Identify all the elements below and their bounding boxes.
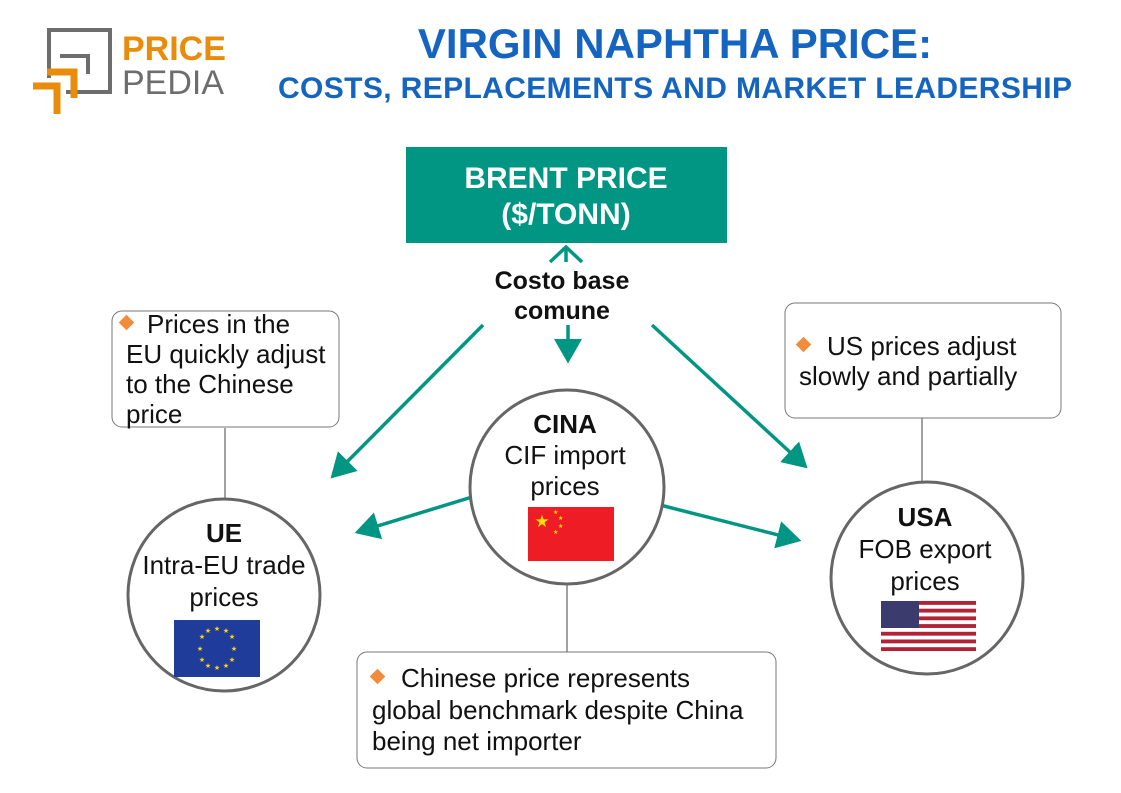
title: COSTS, REPLACEMENTS AND MARKET LEADERSHIP: [278, 72, 1072, 105]
brent price box: ($/TONN): [501, 198, 631, 231]
callout: China: global benchmark despite China: [372, 695, 744, 725]
label: costo base comune: comune: [514, 297, 610, 325]
circle: EU: ★: [205, 627, 211, 635]
circle: EU: ★: [231, 645, 237, 653]
title: VIRGIN NAPHTHA PRICE:: [418, 20, 932, 67]
circle: EU: ★: [229, 633, 235, 641]
callout: China: being net importer: [372, 726, 582, 756]
circle: USA: USA: [898, 502, 953, 532]
circle: EU: Intra-EU trade: [142, 550, 306, 580]
callout: USA: US prices adjust: [827, 331, 1017, 361]
circle: EU: ★: [214, 625, 220, 633]
circle: EU: [128, 499, 320, 691]
circle: China: ★: [534, 512, 550, 531]
logo: PEDIA: [122, 64, 224, 102]
circle: China: ★: [558, 515, 563, 522]
circle: EU: ★: [199, 656, 205, 664]
title: [278, 20, 1072, 105]
circle: EU: prices: [189, 582, 259, 612]
circle: USA: FOB export: [859, 534, 992, 564]
circle: China: ★: [553, 529, 558, 536]
circle: China: prices: [530, 471, 600, 501]
circle: EU: ★: [197, 645, 203, 653]
callout: USA: [785, 303, 1061, 418]
callout: EU: [112, 309, 339, 429]
callout: China: Chinese price represents: [401, 663, 690, 693]
callout: EU: EU quickly adjust: [126, 339, 326, 369]
circle: EU: ★: [229, 656, 235, 664]
callout: USA: slowly and partially: [799, 361, 1017, 391]
callout: EU: Prices in the: [147, 309, 290, 339]
callout: EU: price: [126, 399, 182, 429]
brent price box: BRENT PRICE: [464, 162, 668, 195]
circle: USA: [831, 482, 1023, 674]
circle: EU: ★: [199, 633, 205, 641]
logo: PRICE: [122, 30, 226, 68]
circle: China: [470, 390, 664, 584]
label: costo base comune: Costo base: [495, 267, 629, 295]
circle: China: ★: [553, 509, 558, 516]
brent price box: [406, 147, 727, 243]
circle: China: ★: [558, 523, 563, 530]
label: costo base comune: [495, 267, 629, 325]
circle: USA: prices: [890, 566, 960, 596]
circle: EU: ★: [205, 662, 211, 670]
connector lines: [225, 418, 922, 652]
circle: EU: UE: [206, 518, 242, 548]
circle: EU: ★: [223, 662, 229, 670]
callout: China: [357, 652, 776, 768]
circle: China: CINA: [533, 409, 597, 439]
arrows: [333, 247, 805, 540]
logo: [33, 30, 226, 114]
callout: EU: to the Chinese: [126, 369, 294, 399]
circle: EU: ★: [214, 664, 220, 672]
circle: EU: ★: [223, 627, 229, 635]
circle: China: CIF import: [504, 440, 626, 470]
